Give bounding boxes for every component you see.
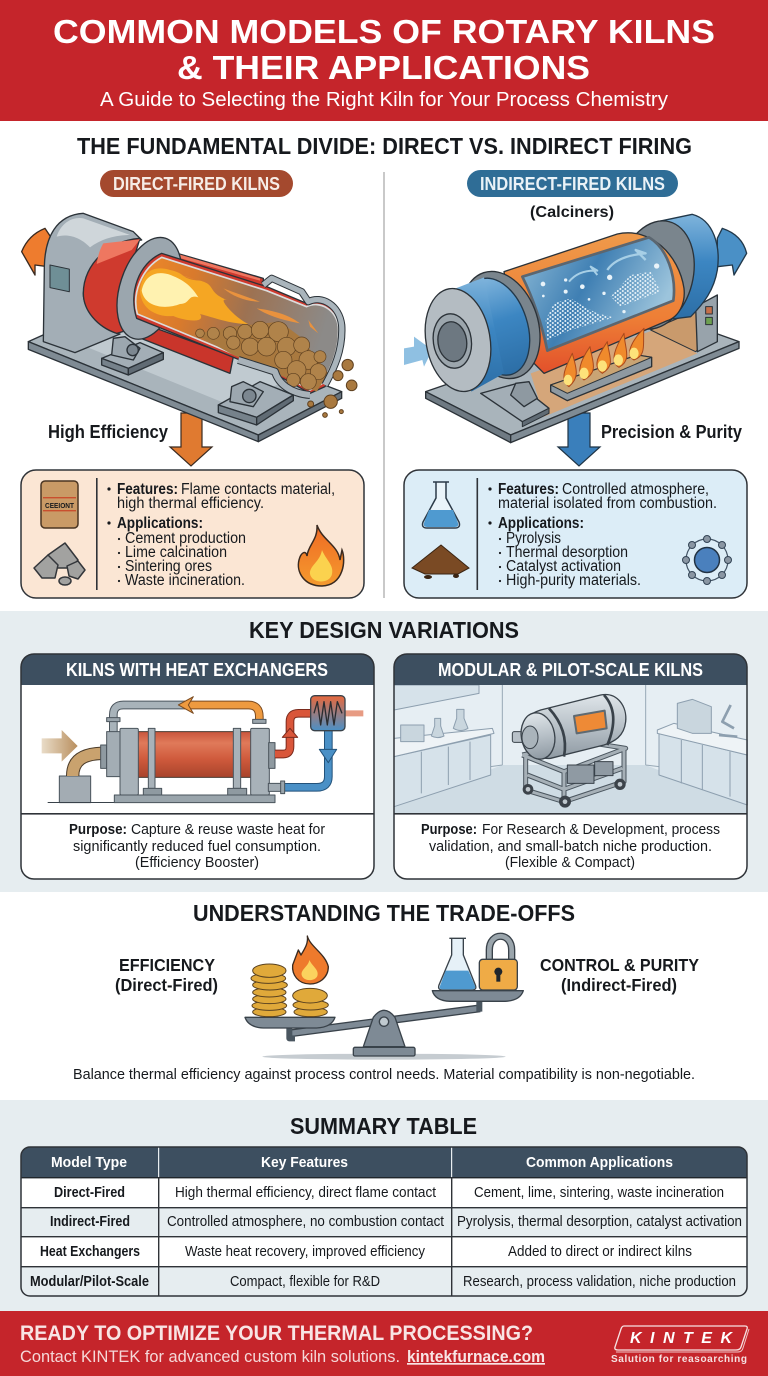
applications list: Thermal desorption (506, 544, 628, 561)
row: direct-fired: Direct-Fired (54, 1185, 125, 1201)
label: efficiency (115, 955, 218, 995)
direct-fired pill label: DIRECT-FIRED KILNS (113, 174, 280, 194)
arrows (404, 337, 432, 367)
features text: high thermal efficiency. (117, 495, 264, 512)
purpose text: validation, and small-batch niche production. (429, 838, 712, 855)
cart frame (522, 742, 626, 802)
applications list: Catalyst activation (506, 558, 621, 575)
call to action (20, 1322, 545, 1366)
shell rim (263, 278, 342, 385)
row: modular/pilot-scale: Research, process validation, niche production (463, 1274, 736, 1290)
row: modular/pilot-scale (30, 1274, 736, 1290)
row: indirect-fired (50, 1214, 742, 1230)
icon: flame (298, 525, 344, 586)
row: indirect-fired: Controlled atmosphere, no combustion contact (167, 1214, 444, 1230)
indirect-fired pill label (467, 170, 678, 197)
purpose text: (Efficiency Booster) (135, 854, 259, 871)
caption: Balance thermal efficiency against process control needs. Material compatibility is non-negotiable. (73, 1066, 695, 1083)
material dots (541, 263, 661, 340)
icon: cement bag: CEEIONT (45, 503, 75, 510)
heading: trade-offs: UNDERSTANDING THE TRADE-OFFS (193, 900, 575, 926)
card: kilns with heat exchangers: KILNS WITH HEAT EXCHANGERS (66, 660, 328, 680)
KINTEK logo (611, 1326, 749, 1365)
features text (488, 481, 717, 512)
row: indirect-fired: Pyrolysis, thermal desorption, catalyst activation (457, 1214, 742, 1230)
balance scale illustration (245, 936, 523, 1060)
applications list: Lime calcination (125, 544, 227, 561)
label: control and purity: (Indirect-Fired) (561, 975, 677, 995)
features text (107, 481, 335, 512)
illustration: lab scene with pilot kiln (394, 685, 747, 813)
falling rocks (308, 359, 357, 417)
fire (293, 936, 328, 984)
row: direct-fired: Cement, lime, sintering, waste incineration (474, 1185, 724, 1201)
table header row (51, 1154, 673, 1171)
purpose text (421, 821, 720, 871)
features text: Controlled atmosphere, (562, 481, 709, 498)
call to action: Contact KINTEK for advanced custom kiln solutions. (20, 1347, 400, 1366)
right drum (657, 214, 718, 320)
label: precision and purity: Precision & Purity (601, 422, 742, 442)
KINTEK logo: KINTEK (630, 1330, 733, 1347)
applications list (107, 515, 246, 589)
call to action: kintekfurnace.com (407, 1347, 545, 1366)
purpose text: Capture & reuse waste heat for (131, 821, 325, 838)
footer banner (0, 1311, 768, 1376)
card: kilns with heat exchangers (21, 654, 374, 879)
calciners label: (Calciners) (530, 204, 614, 221)
indirect-fired pill label: INDIRECT-FIRED KILNS (480, 174, 665, 194)
icon: soil pile (412, 545, 469, 579)
row: direct-fired (54, 1185, 724, 1201)
title (53, 13, 715, 86)
row: heat exchangers (40, 1244, 692, 1260)
table (21, 1147, 747, 1296)
illustration: indirect-fired kiln (404, 213, 747, 443)
purpose text: Purpose: (421, 821, 477, 838)
beam (290, 1008, 480, 1033)
heading: key design variations: KEY DESIGN VARIATIONS (249, 617, 519, 643)
applications list: Waste incineration. (125, 572, 245, 589)
burner flames (564, 328, 644, 387)
diagram: heat exchanger circuit (42, 696, 363, 803)
right support and control box (651, 310, 697, 352)
direct-fired pill label (100, 170, 293, 197)
icon: cement bag (41, 481, 78, 528)
fulcrum (363, 1010, 405, 1047)
row: modular/pilot-scale: Modular/Pilot-Scale (30, 1274, 149, 1290)
label: control and purity (540, 955, 699, 995)
purpose text: For Research & Development, process (482, 821, 720, 838)
label: control and purity: CONTROL & PURITY (540, 955, 699, 975)
applications list (488, 515, 641, 589)
call to action: READY TO OPTIMIZE YOUR THERMAL PROCESSING? (20, 1322, 533, 1345)
pilot kiln (512, 732, 526, 742)
icon: catalyst particle (682, 536, 732, 584)
illustration: direct-fired kiln (22, 213, 357, 442)
arrow: indirect output down (558, 413, 600, 466)
purpose text: (Flexible & Compact) (505, 854, 635, 871)
subtitle: A Guide to Selecting the Right Kiln for Your Process Chemistry (100, 89, 668, 111)
rollers (102, 343, 163, 368)
left ring and drum (448, 261, 553, 389)
table header row: Model Type (51, 1154, 127, 1171)
burner (551, 355, 652, 401)
table header row: Key Features (261, 1154, 348, 1171)
row: heat exchangers: Waste heat recovery, improved efficiency (185, 1244, 426, 1260)
applications list: Applications: (498, 515, 584, 532)
icon: flask (422, 482, 460, 528)
features text: Flame contacts material, (181, 481, 335, 498)
cabinets (394, 685, 747, 807)
row: indirect-fired: Indirect-Fired (50, 1214, 130, 1230)
panel: indirect-fired kilns (404, 170, 747, 598)
title: COMMON MODELS OF ROTARY KILNS (53, 13, 715, 50)
roller support (481, 383, 549, 422)
purpose text (69, 821, 325, 871)
title: & THEIR APPLICATIONS (177, 49, 590, 86)
section band: summary table (0, 1100, 768, 1311)
icon: rocks (34, 543, 85, 585)
sight window (522, 237, 674, 351)
applications list: Sintering ores (125, 558, 212, 575)
row: heat exchangers: Heat Exchangers (40, 1244, 140, 1260)
features text: Features: (498, 481, 559, 498)
purpose text: Purpose: (69, 821, 127, 838)
row: heat exchangers: Added to direct or indirect kilns (508, 1244, 692, 1260)
indirect-fired info card (404, 470, 747, 598)
header banner (0, 0, 768, 121)
card: modular and pilot-scale kilns (394, 654, 747, 879)
applications list: Pyrolysis (506, 530, 561, 547)
features text: material isolated from combustion. (498, 495, 717, 512)
clinker pile (195, 322, 328, 392)
purpose text: significantly reduced fuel consumption. (73, 838, 321, 855)
KINTEK logo: Salution for reasoarching (611, 1354, 747, 1365)
flask (439, 938, 476, 990)
row: modular/pilot-scale: Compact, flexible for R&D (230, 1274, 380, 1290)
arrow: direct heat output down (170, 413, 212, 466)
heading: summary table: SUMMARY TABLE (290, 1113, 477, 1139)
section band: key design variations (0, 611, 768, 892)
lock (489, 936, 512, 960)
direct-fired info card (21, 470, 364, 598)
row: direct-fired: High thermal efficiency, direct flame contact (175, 1185, 436, 1201)
label: efficiency: EFFICIENCY (119, 955, 215, 975)
flame (140, 268, 248, 324)
pans (245, 1017, 335, 1028)
coins (251, 964, 328, 1017)
section: understanding the trade-offs (73, 900, 699, 1083)
label: high efficiency: High Efficiency (48, 422, 168, 442)
lab props (401, 699, 737, 742)
features text: Features: (117, 481, 178, 498)
label: efficiency: (Direct-Fired) (115, 975, 218, 995)
shell (504, 233, 684, 373)
section heading: fundamental divide: THE FUNDAMENTAL DIVIDE: DIRECT VS. INDIRECT FIRING (77, 133, 692, 159)
applications list: High-purity materials. (506, 572, 641, 589)
applications list: Applications: (117, 515, 203, 532)
card: modular and pilot-scale kilns: MODULAR & PILOT-SCALE KILNS (438, 660, 703, 680)
applications list: Cement production (125, 530, 246, 547)
panel: direct-fired kilns (21, 170, 364, 598)
table header row: Common Applications (526, 1154, 673, 1171)
